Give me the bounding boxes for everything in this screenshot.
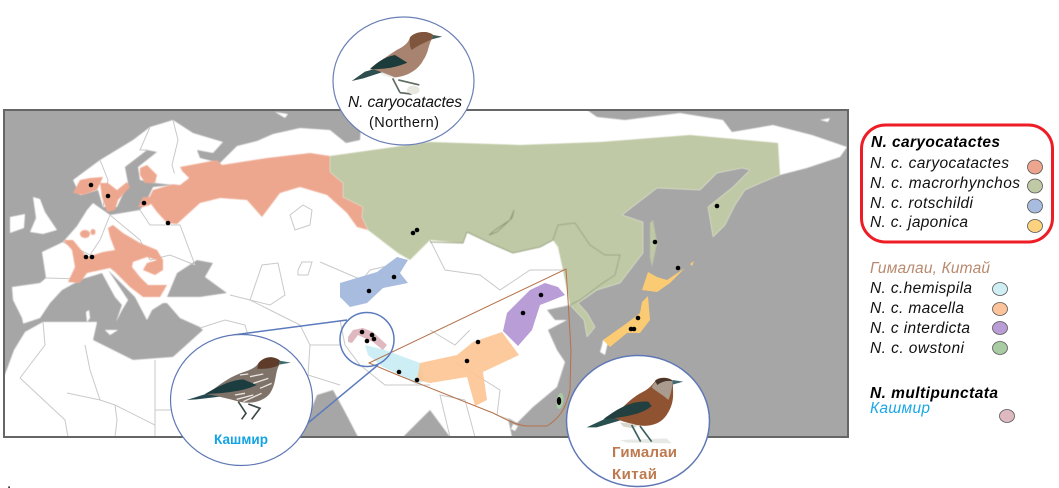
legend group: N. caryocatactes: [862, 125, 1052, 242]
legend group: N. caryocatactes: N. c. japonica: [870, 214, 968, 231]
icon: N. multipunctata bird: [187, 357, 291, 419]
country borders: [20, 120, 565, 437]
callout: Kashmir inset circle and connectors: [233, 312, 394, 423]
legend group: N. multipunctata: Кашмир: [870, 400, 930, 417]
text: Кашмир: Кашмир: [214, 432, 268, 447]
legend group: N. multipunctata: N. multipunctata: [870, 385, 998, 402]
legend group: Himalaya, China: N. c. macella: [870, 300, 964, 317]
map frame: [4, 110, 848, 437]
map panel: [4, 110, 848, 437]
text: Гималаи Китай: [612, 444, 677, 483]
bird circle: Northern nutcracker: [333, 17, 474, 145]
legend group: Himalaya, China: [870, 260, 1008, 357]
bird circle: Kashmir: [170, 334, 312, 466]
icon: N. hemispila bird: [587, 378, 683, 443]
land masses: [4, 110, 847, 437]
legend group: N. caryocatactes: N. c. caryocatactes: [870, 155, 1009, 172]
sample location dots: [84, 183, 719, 405]
text: N. caryocatactes (Northern): (Northern): [369, 115, 439, 131]
text: Гималаи Китай: Гималаи: [612, 444, 677, 461]
range: N. c. interdicta: [503, 283, 565, 346]
legend group: Himalaya, China: N. c interdicta: [870, 320, 970, 337]
range: N. c. owstoni: [555, 393, 565, 409]
legend group: Himalaya, China: Гималаи, Китай: [870, 260, 990, 277]
range: N. c. caryocatactes: [63, 153, 368, 297]
legend group: N. caryocatactes: N. c. rotschildi: [870, 195, 974, 212]
range: N. c. macrorhynchos: [330, 135, 780, 337]
range: N. c. rotschildi: [340, 257, 408, 307]
legend group: N. caryocatactes: N. caryocatactes: [871, 134, 1000, 151]
legend group: N. caryocatactes: N. c. macrorhynchos: [870, 175, 1020, 192]
legend group: Himalaya, China: N. c. owstoni: [870, 340, 965, 357]
legend group: Himalaya, China: N. c.hemispila: [870, 280, 972, 297]
range: N. c. macella: [417, 332, 519, 406]
text: N. caryocatactes (Northern): [348, 94, 462, 131]
text: N. caryocatactes (Northern): N. caryocatactes: [348, 94, 462, 111]
range: N. c. hemispila: [365, 345, 425, 385]
legend group: N. multipunctata: [870, 385, 1014, 422]
range: N. multipunctata: [348, 328, 387, 350]
range: N. c. japonica: [603, 261, 694, 347]
bird circle: Himalaya and China: [566, 356, 710, 486]
text: Гималаи Китай: Китай: [612, 466, 657, 483]
icon: N. caryocatactes bird: [352, 32, 442, 94]
callout: Himalaya-China range outline: [369, 269, 571, 426]
